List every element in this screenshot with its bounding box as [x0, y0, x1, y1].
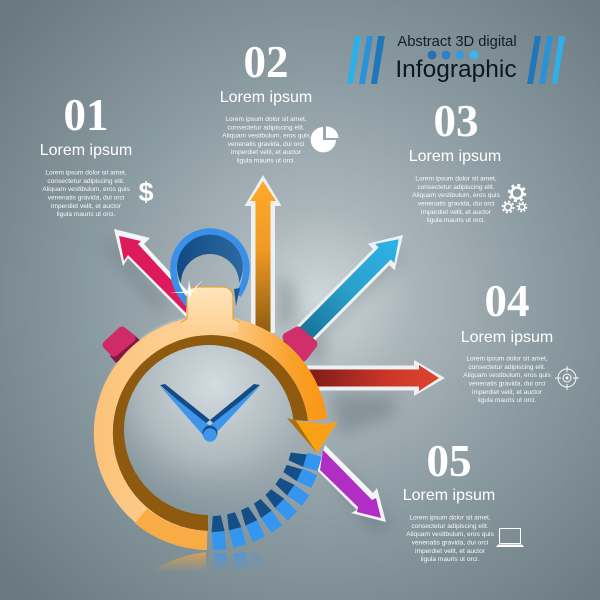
sparkle [170, 279, 204, 303]
arrow 01: pink [114, 229, 192, 319]
section 02: consectetur adipiscing elit. [227, 124, 305, 131]
section 02: 02 [244, 37, 288, 87]
section 02: ligula mauris ut orci. [237, 158, 295, 164]
section 05 [403, 436, 495, 563]
section 02: Lorem ipsum [220, 89, 312, 106]
section 02: Aliquam vestibulum, eros quis [222, 133, 310, 140]
clock face glow [94, 314, 326, 546]
section 01: imperdiet velit, et auctor [51, 203, 122, 210]
floor reflection [150, 552, 266, 573]
section 05: consectetur adipiscing elit. [411, 523, 489, 530]
icon: target [555, 366, 579, 390]
icon: dollar: $ [138, 177, 154, 207]
title block: Infographic [395, 56, 517, 83]
section 04: ligula mauris ut orci. [478, 397, 536, 404]
alarm button: right [281, 331, 313, 363]
section 04: imperdiet velit, et auctor [472, 389, 543, 396]
clock handle: blue loop [173, 232, 246, 306]
icon: laptop [496, 528, 524, 547]
section 01: consectetur adipiscing elit. [47, 178, 125, 185]
section 03: Lorem ipsum dolor sit amet, [415, 176, 497, 182]
section 04: Lorem ipsum [461, 329, 553, 346]
section 02: Lorem ipsum dolor sit amet, [225, 116, 307, 123]
section 01: venenatis gravida, dui orci [48, 194, 125, 202]
arrow 05: purple [317, 445, 386, 522]
section 01 [40, 90, 132, 218]
section 05: venenatis gravida, dui orci [412, 540, 489, 546]
section 02: venenatis gravida, dui orci [228, 141, 305, 148]
section 05: 05 [426, 436, 472, 486]
title block [347, 34, 565, 84]
section 05: ligula mauris ut orci. [421, 556, 479, 563]
section 03 [409, 96, 501, 224]
clock hands [160, 384, 260, 442]
section 01: 01 [64, 90, 108, 140]
section 05: Lorem ipsum dolor sit amet, [409, 514, 491, 522]
section 02 [220, 37, 312, 164]
section 01: Aliquam vestibulum, eros quis [42, 186, 130, 193]
arrow 04: red [307, 360, 445, 396]
section 05: Aliquam vestibulum, eros quis [406, 531, 494, 538]
section 04: Aliquam vestibulum, eros quis [463, 372, 551, 379]
section 04: consectetur adipiscing elit. [468, 364, 546, 371]
soft shadows [108, 238, 402, 530]
section 04: 04 [484, 276, 530, 326]
icon: gears [502, 185, 526, 212]
section 04 [461, 276, 553, 404]
section 01: Lorem ipsum dolor sit amet, [45, 170, 127, 176]
title block: Abstract 3D digital [397, 34, 517, 50]
section 04: Lorem ipsum dolor sit amet, [466, 356, 548, 362]
section 03: Aliquam vestibulum, eros quis [412, 192, 500, 199]
section 05: imperdiet velit, et auctor [415, 548, 486, 555]
section 01: Lorem ipsum [40, 142, 132, 159]
section 05: Lorem ipsum [403, 487, 495, 504]
clock ring [103, 326, 317, 540]
progress blocks [210, 448, 322, 550]
section 03: ligula mauris ut orci. [427, 217, 485, 224]
ring arrowhead [287, 418, 338, 453]
section 02: imperdiet velit, et auctor [231, 149, 302, 156]
section 03: consectetur adipiscing elit. [417, 184, 495, 191]
section 03: imperdiet velit, et auctor [421, 209, 492, 216]
section 01: ligula mauris ut orci. [57, 211, 115, 218]
arrow 03: blue [284, 222, 417, 355]
section 03: Lorem ipsum [409, 148, 501, 165]
clock stem [181, 287, 240, 332]
section 03: 03 [434, 96, 478, 146]
alarm button: left [107, 331, 142, 363]
section 04: venenatis gravida, dui orci [469, 380, 546, 388]
icon: pie chart [311, 126, 338, 152]
section 03: venenatis gravida, dui orci [418, 200, 495, 208]
arrow 02: orange [244, 175, 282, 333]
